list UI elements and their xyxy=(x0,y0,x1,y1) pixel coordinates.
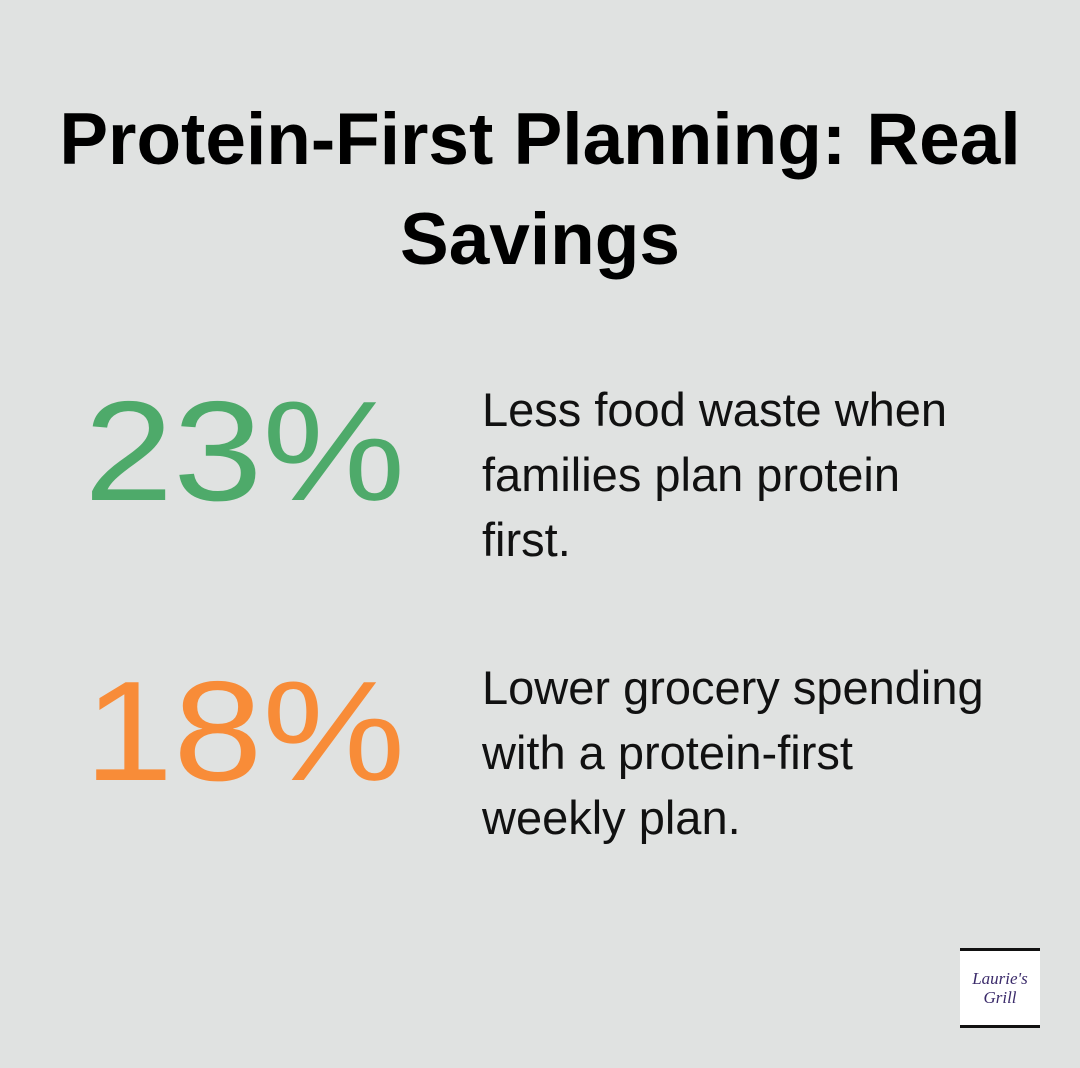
text: food waste xyxy=(482,383,947,566)
title: Protein-First Planning: Real xyxy=(59,99,1021,180)
logo: Laurie's xyxy=(972,969,1028,988)
text: grocery spending: with a protein-first xyxy=(482,726,853,779)
logo: Grill xyxy=(983,988,1017,1007)
title xyxy=(59,99,1021,280)
logo xyxy=(960,948,1040,1028)
text: food waste: Less food waste when xyxy=(482,383,947,436)
text: grocery spending: Lower grocery spending xyxy=(482,661,984,714)
title: Savings xyxy=(400,199,680,280)
stat: 23%: 23% xyxy=(84,372,405,531)
text: grocery spending xyxy=(482,661,984,844)
text: food waste: families plan protein xyxy=(482,448,900,501)
text: grocery spending: weekly plan. xyxy=(482,791,741,844)
text: food waste: first. xyxy=(482,513,571,566)
stat: 18%: 18% xyxy=(84,652,405,811)
